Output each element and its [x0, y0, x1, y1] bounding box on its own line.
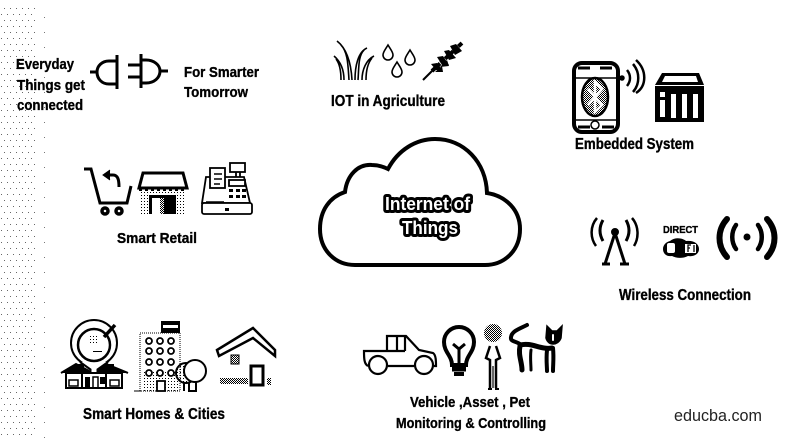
text: vehicle asset pet monitoring and controlling: Monitoring & Controlling: [396, 415, 546, 432]
text: everyday things get connected: connected: [17, 97, 83, 114]
text: internet of things: [385, 194, 471, 238]
panel: central cloud: [320, 139, 520, 265]
icon: plug and socket: [90, 54, 168, 89]
icon: wifi direct: [663, 224, 699, 258]
text: everyday things get connected: Everyday: [16, 56, 75, 73]
icon: wheat: [423, 43, 462, 80]
panel: everyday things: [16, 54, 259, 114]
icon: person: [484, 324, 502, 389]
text: internet of things: Things: [402, 218, 458, 238]
icon: cash register: [202, 163, 252, 214]
icon: grass: [334, 41, 374, 80]
icon: store: [655, 73, 704, 122]
watermark: educba.com: educba.com: [674, 406, 762, 425]
icon: wifi direct: DIRECT: [663, 224, 699, 236]
panel: monitoring and controlling: [364, 324, 562, 432]
text: for smarter tomorrow: Tomorrow: [184, 84, 248, 101]
text: wireless connection: Wireless Connection: [619, 287, 751, 304]
icon: house: [217, 328, 275, 385]
icon: cloud: [320, 139, 520, 265]
text: smart retail: Smart Retail: [117, 230, 197, 247]
icon: signal waves: [620, 60, 644, 93]
text: IOT in agriculture: IOT in Agriculture: [331, 93, 445, 110]
icon: cat: [511, 325, 562, 371]
icon: shopping cart: [84, 169, 131, 214]
panel: wireless connection: [592, 218, 774, 304]
icon: pickup truck: [364, 336, 436, 374]
icon: antenna: [592, 218, 638, 264]
text: smart homes and cities: Smart Homes & Cities: [83, 406, 225, 423]
icon: light bulb: [444, 327, 474, 374]
icon: location pin with houses: [61, 320, 128, 388]
text: everyday things get connected: [16, 56, 85, 114]
icon: office building with trees: [134, 321, 206, 391]
text: vehicle asset pet monitoring and controlling: [396, 394, 546, 432]
text: for smarter tomorrow: For Smarter: [184, 64, 259, 81]
panel: smart homes and cities: [61, 320, 275, 423]
icon: shop: [139, 173, 187, 214]
dotted background strip: [0, 4, 52, 439]
text: everyday things get connected: Things get: [17, 77, 85, 94]
panel: embedded system: [574, 60, 704, 153]
panel: smart retail: [84, 163, 252, 247]
text: embedded system: Embedded System: [575, 136, 694, 153]
text: vehicle asset pet monitoring and controlling: Vehicle ,Asset , Pet: [410, 394, 530, 411]
icon: water drops: [383, 45, 415, 77]
icon: broadcast signal: [720, 219, 774, 257]
text: for smarter tomorrow: [184, 64, 259, 101]
panel: agriculture: [331, 41, 462, 110]
text: internet of things: Internet of: [385, 194, 471, 214]
icon: phone with bluetooth: [574, 63, 618, 132]
